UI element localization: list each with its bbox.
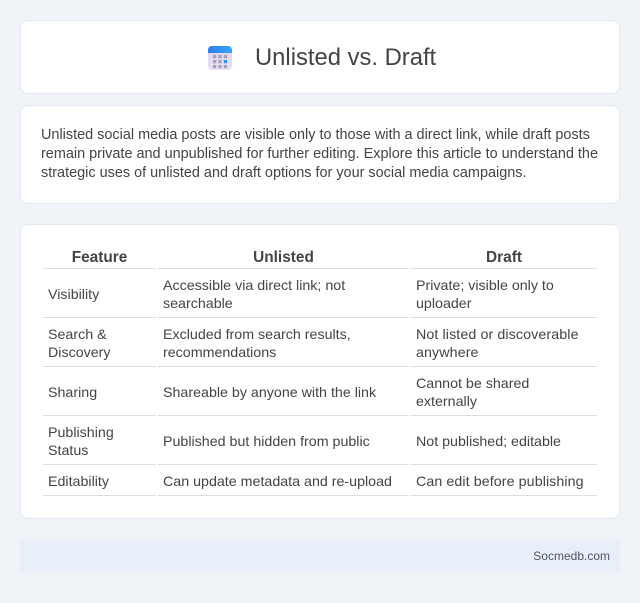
row: Search & Discovery: Discovery bbox=[48, 345, 111, 361]
row: Editability: Can update metadata and re-upload bbox=[163, 474, 392, 490]
intro paragraph: Unlisted social media posts are visible only to those with a direct link, while draft posts bbox=[41, 127, 590, 143]
row: Editability bbox=[48, 474, 584, 490]
intro paragraph: strategic uses of unlisted and draft options for your social media campaigns. bbox=[41, 165, 527, 181]
row: Search & Discovery: Excluded from search results, bbox=[163, 327, 351, 343]
title: Unlisted vs. Draft bbox=[255, 44, 436, 71]
intro paragraph: remain private and unpublished for further editing. Explore this article to understand the bbox=[41, 146, 598, 162]
row: Publishing Status: Not published; editable bbox=[416, 434, 561, 450]
row: Sharing: Shareable by anyone with the link bbox=[163, 385, 376, 401]
panel: title card bbox=[20, 20, 620, 94]
header: Draft: Draft bbox=[486, 249, 522, 266]
icon: calendar bbox=[208, 46, 232, 70]
header: Feature: Feature bbox=[72, 249, 127, 266]
row: Sharing: externally bbox=[416, 394, 477, 410]
row: Visibility: Visibility bbox=[48, 287, 99, 303]
row: Search & Discovery: anywhere bbox=[416, 345, 479, 361]
row: Sharing: Sharing bbox=[48, 385, 97, 401]
row: Search & Discovery: recommendations bbox=[163, 345, 276, 361]
row: Sharing bbox=[48, 376, 529, 410]
footer bar bbox=[20, 539, 620, 573]
row: Editability: Editability bbox=[48, 474, 109, 490]
footer source text: Socmedb.com bbox=[533, 549, 610, 563]
row: Sharing: Cannot be shared bbox=[416, 376, 529, 392]
row: Search & Discovery bbox=[48, 327, 579, 361]
row: Publishing Status: Status bbox=[48, 443, 88, 459]
row: Search & Discovery: Search & bbox=[48, 327, 107, 343]
row: Visibility: Accessible via direct link; not bbox=[163, 278, 345, 294]
panel: intro text card bbox=[20, 105, 620, 204]
row: Search & Discovery: Not listed or discoverable bbox=[416, 327, 579, 343]
row: Visibility: uploader bbox=[416, 296, 471, 312]
row: Visibility: searchable bbox=[163, 296, 233, 312]
row: Publishing Status: Publishing bbox=[48, 425, 114, 441]
row: Editability: Can edit before publishing bbox=[416, 474, 584, 490]
header: Unlisted: Unlisted bbox=[253, 249, 314, 266]
row: Publishing Status bbox=[48, 425, 561, 459]
row: Visibility bbox=[48, 278, 554, 312]
intro paragraph bbox=[41, 127, 598, 181]
panel: comparison table card bbox=[20, 224, 620, 519]
row: Visibility: Private; visible only to bbox=[416, 278, 554, 294]
row: Publishing Status: Published but hidden from public bbox=[163, 434, 370, 450]
